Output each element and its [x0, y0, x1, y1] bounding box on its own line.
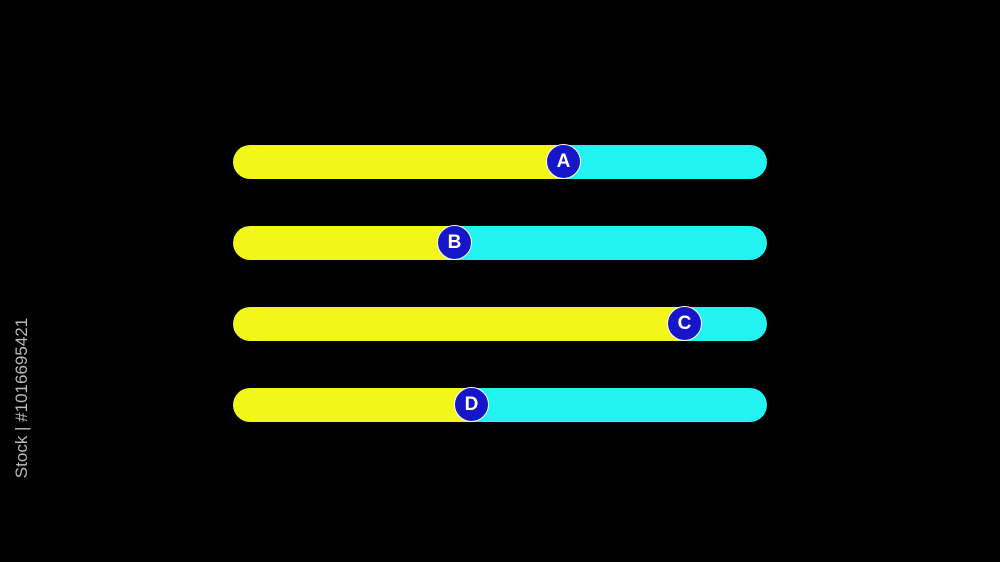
bar C — [233, 307, 767, 341]
marker B: B — [448, 232, 461, 253]
bar D — [233, 388, 767, 422]
marker B — [437, 225, 472, 260]
marker A: A — [557, 151, 570, 172]
bar A — [233, 145, 767, 179]
marker D: D — [465, 394, 478, 415]
marker C: C — [678, 313, 691, 334]
marker C — [667, 306, 702, 341]
bar B — [233, 226, 767, 260]
marker D — [454, 387, 489, 422]
marker A — [546, 144, 581, 179]
stock id text: Stock | #1016695421 — [12, 318, 31, 478]
